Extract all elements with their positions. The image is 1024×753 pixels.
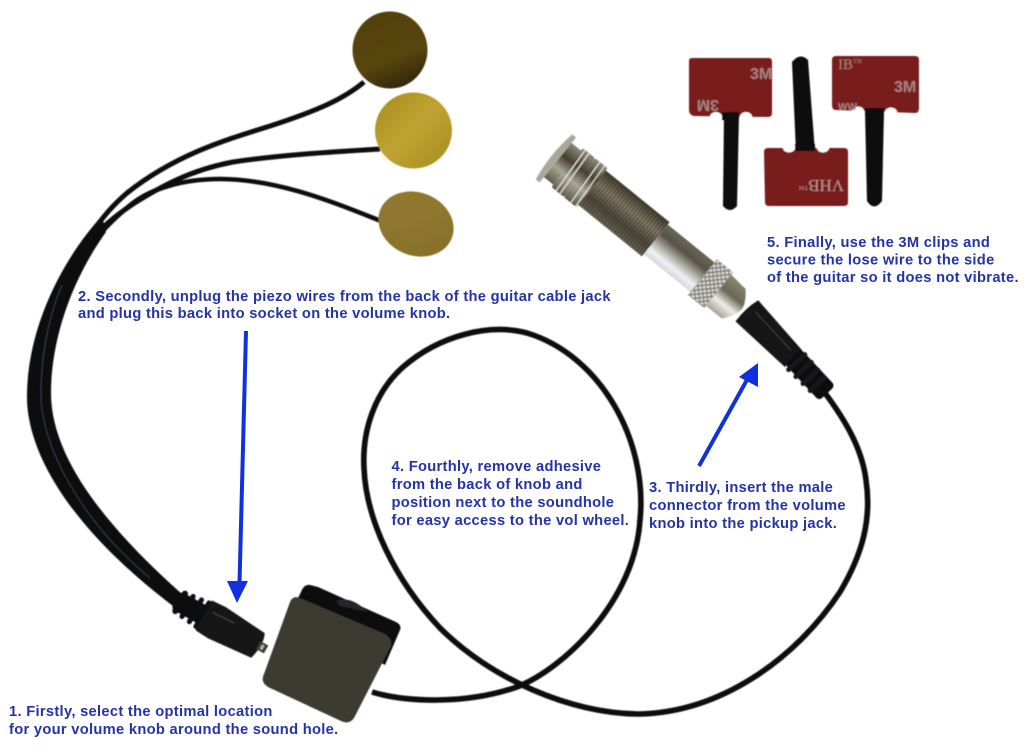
VHB adhesive clip: middle: VHB — [808, 176, 844, 195]
piezo disc: top — [352, 12, 428, 88]
volume knob — [263, 585, 400, 722]
step 2 text: 2. Secondly, unplug the piezo wires from the back of the guitar cable jack — [78, 289, 611, 305]
piezo connector plugged into knob — [167, 584, 275, 666]
arrow: step 3 up to jack — [699, 363, 758, 466]
3M adhesive clip: right: IB — [838, 57, 853, 73]
step 4 text: from the back of knob and — [392, 477, 583, 493]
step 3 text: connector from the volume — [649, 498, 846, 514]
step 5 text: 5. Finally, use the 3M clips and — [767, 235, 990, 251]
guitar cable jack — [534, 133, 760, 332]
3M adhesive clip: left: 3M — [697, 96, 719, 113]
step 5 text: of the guitar so it does not vibrate. — [767, 270, 1019, 286]
step 4 text: position next to the soundhole — [392, 495, 614, 511]
audio cable loop — [364, 330, 868, 714]
3M adhesive clip: right: TM — [853, 59, 863, 65]
step 2 text: and plug this back into socket on the volume knob. — [78, 306, 450, 322]
male connector on cable — [734, 299, 837, 406]
3M adhesive clip: left: 3M — [750, 66, 772, 83]
3M adhesive clip: right: WW — [838, 102, 857, 113]
step 5 text: secure the lose wire to the side — [767, 252, 995, 268]
piezo wire: lower disc — [85, 179, 381, 252]
arrow: step 2 down to knob socket — [227, 331, 248, 603]
VHB adhesive clip: middle: TM — [798, 184, 808, 190]
wire bundle — [27, 216, 183, 606]
step 3 text: knob into the pickup jack. — [649, 516, 837, 532]
step 3 text: 3. Thirdly, insert the male — [649, 480, 833, 496]
VHB adhesive clip: middle — [764, 56, 848, 206]
piezo disc: lower — [369, 180, 463, 268]
piezo wire: top disc — [95, 82, 364, 228]
step 4 text: for easy access to the vol wheel. — [392, 513, 629, 529]
piezo wire: middle disc — [92, 149, 380, 238]
3M adhesive clip: right: 3M — [894, 79, 916, 96]
step 1 text: 1. Firstly, select the optimal location — [9, 704, 273, 720]
3M adhesive clip: left — [689, 58, 772, 210]
3M adhesive clip: right — [832, 56, 919, 206]
piezo disc: middle — [375, 92, 452, 168]
step 1 text: for your volume knob around the sound hole. — [9, 722, 339, 738]
step 4 text: 4. Fourthly, remove adhesive — [392, 459, 601, 475]
